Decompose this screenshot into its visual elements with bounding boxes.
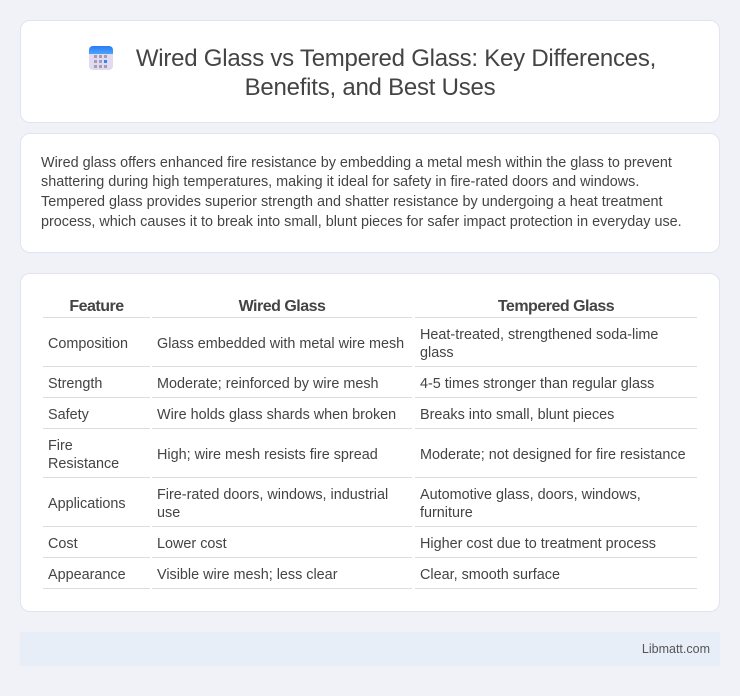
row: safety: Breaks into small, blunt pieces bbox=[420, 407, 614, 423]
row: applications: Applications bbox=[48, 496, 126, 512]
row: applications bbox=[48, 487, 641, 521]
row: fire resistance: Resistance bbox=[48, 456, 119, 472]
title: Benefits, and Best Uses bbox=[245, 74, 495, 101]
row: strength bbox=[48, 376, 654, 392]
row: safety: Wire holds glass shards when broken bbox=[157, 407, 396, 423]
row: cost: Cost bbox=[48, 536, 78, 552]
row: fire resistance: High; wire mesh resists fire spread bbox=[157, 447, 378, 463]
row: strength: Moderate; reinforced by wire mesh bbox=[157, 376, 379, 392]
row: strength: 4-5 times stronger than regular glass bbox=[420, 376, 654, 392]
header panel bbox=[20, 20, 720, 123]
comparison table bbox=[43, 298, 697, 589]
row: appearance: Visible wire mesh; less clear bbox=[157, 567, 337, 583]
row: appearance bbox=[48, 567, 560, 583]
row: cost: Lower cost bbox=[157, 536, 227, 552]
row: composition: Heat-treated, strengthened soda-lime bbox=[420, 327, 658, 343]
footer text: Libmatt.com: Libmatt.com bbox=[642, 642, 710, 656]
summary panel bbox=[20, 133, 720, 253]
row: appearance: Clear, smooth surface bbox=[420, 567, 560, 583]
table header: Tempered Glass bbox=[498, 298, 614, 315]
summary text: process, which causes it to break into small, blunt pieces for safer impact protection in everyday use. bbox=[41, 214, 682, 230]
row: fire resistance: Fire bbox=[48, 438, 73, 454]
icon: calendar bbox=[89, 46, 113, 70]
comparison table panel bbox=[20, 273, 720, 612]
table header: Feature bbox=[69, 298, 124, 315]
summary text: Tempered glass provides superior strength and shatter resistance by undergoing a heat treatment bbox=[41, 194, 663, 210]
footer bar bbox=[20, 632, 720, 666]
row: applications: Automotive glass, doors, windows, bbox=[420, 487, 641, 503]
row: applications: Fire-rated doors, windows, industrial bbox=[157, 487, 388, 503]
row: strength: Strength bbox=[48, 376, 102, 392]
row: composition bbox=[48, 327, 658, 361]
summary text bbox=[41, 155, 682, 230]
row: composition: Glass embedded with metal wire mesh bbox=[157, 336, 404, 352]
row: cost bbox=[48, 536, 656, 552]
row: appearance: Appearance bbox=[48, 567, 126, 583]
title bbox=[136, 45, 656, 101]
title: Wired Glass vs Tempered Glass: Key Differences, bbox=[136, 45, 656, 72]
row: composition: Composition bbox=[48, 336, 128, 352]
row: safety: Safety bbox=[48, 407, 89, 423]
row: applications: use bbox=[157, 505, 180, 521]
row: applications: furniture bbox=[420, 505, 473, 521]
row: cost: Higher cost due to treatment process bbox=[420, 536, 656, 552]
summary text: Wired glass offers enhanced fire resistance by embedding a metal mesh within the glass to prevent bbox=[41, 155, 672, 171]
table header bbox=[69, 298, 614, 315]
row: fire resistance bbox=[48, 438, 686, 472]
row: composition: glass bbox=[420, 345, 454, 361]
row: safety bbox=[48, 407, 614, 423]
summary text: shattering during high temperatures, making it ideal for safety in fire-rated doors and windows. bbox=[41, 174, 639, 190]
row: fire resistance: Moderate; not designed for fire resistance bbox=[420, 447, 686, 463]
table header: Wired Glass bbox=[239, 298, 325, 315]
